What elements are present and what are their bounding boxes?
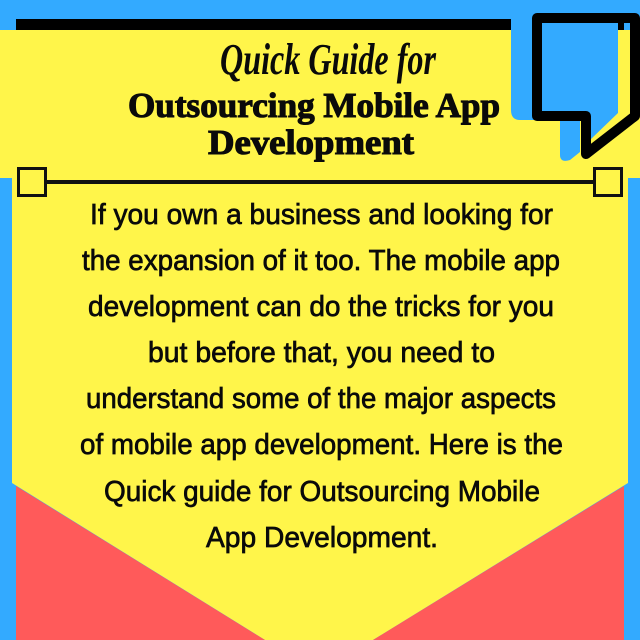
- body text: the expansion of it too. The mobile app: [82, 245, 560, 277]
- top black bar: [16, 19, 511, 30]
- body text: Quick guide for Outsourcing Mobile: [104, 476, 540, 508]
- body text: [80, 199, 563, 554]
- body text: App Development.: [206, 522, 438, 554]
- icon: small black notch in speech bubble: [618, 23, 624, 30]
- body text: but before that, you need to: [148, 337, 495, 369]
- heading line one: Outsourcing Mobile App: [128, 86, 500, 125]
- body text: understand some of the major aspects: [86, 383, 556, 415]
- panel: red left envelope flap: [16, 486, 265, 640]
- body text: If you own a business and looking for: [90, 199, 553, 231]
- icon: blue speech bubble shadow: [511, 0, 618, 161]
- icon: black speech bubble outline: [537, 18, 635, 154]
- divider with end squares: [18, 168, 622, 196]
- panel: red right envelope flap: [373, 486, 624, 640]
- body text: of mobile app development. Here is the: [80, 429, 563, 461]
- heading line two: Development: [208, 123, 414, 162]
- title script line: Quick Guide for: [220, 35, 437, 84]
- body text: development can do the tricks for you: [88, 291, 554, 323]
